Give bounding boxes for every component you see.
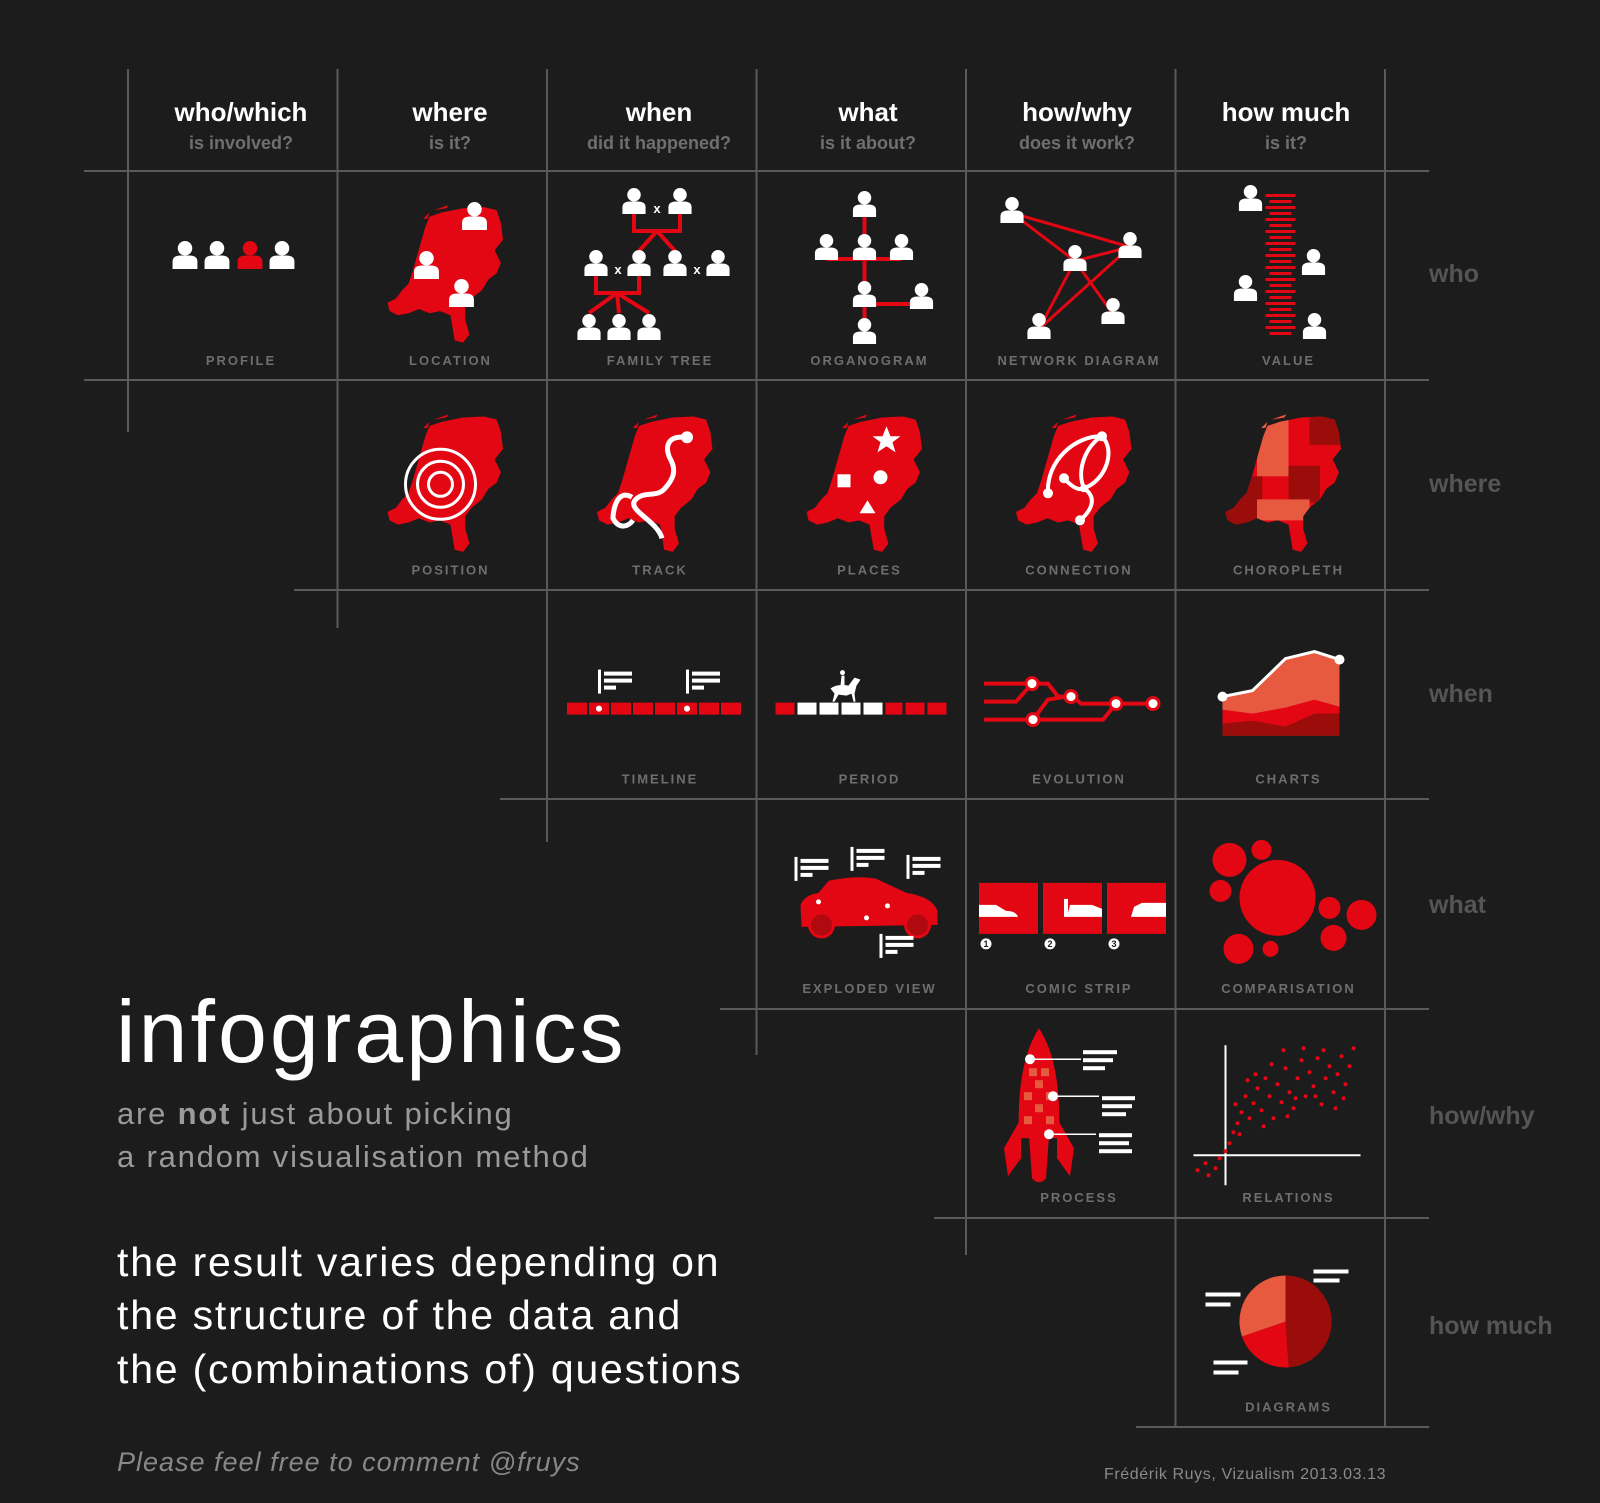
cell: comic strip: 3 [1111,939,1117,949]
cell: track [597,414,712,577]
cell: relations [1194,1045,1360,1205]
header: who/which: who/which [174,97,307,127]
cell: family tree: x [693,262,701,277]
header: when [587,97,731,153]
header: what: is it about? [820,133,916,153]
cell: network diagram [998,197,1160,368]
subtitle: are not just about picking [117,1096,514,1131]
header: how/why [1019,97,1135,153]
cell: connection [1016,414,1133,577]
cell: profile: PROFILE [206,353,276,368]
header: who/which: is involved? [189,133,293,153]
row label: how much: how much [1429,1312,1553,1340]
cell: period: PERIOD [839,772,900,787]
subtitle: a random visualisation method [117,1139,590,1174]
header: where: is it? [429,133,471,153]
cell: period [776,670,946,787]
cell: comic strip [979,883,1166,996]
credit: Frédérik Ruys, Vizualism 2013.03.13 [1104,1466,1386,1483]
cell: network diagram: NETWORK DIAGRAM [998,353,1160,368]
cell: family tree [577,188,730,368]
cell: position [388,414,503,577]
cell: family tree: x [653,201,661,216]
header: how much: is it? [1265,133,1307,153]
header: how/why: does it work? [1019,133,1135,153]
cell: connection: CONNECTION [1025,562,1133,577]
header: who/which [174,97,307,153]
cell: family tree: x [614,262,622,277]
cell: timeline: TIMELINE [622,772,698,787]
header: what: what [837,97,898,127]
cell: evolution [984,678,1159,787]
row label: where: where [1428,470,1501,498]
cell: comparisation: COMPARISATION [1221,981,1356,996]
cell: organogram: ORGANOGRAM [810,353,929,368]
header: when: when [625,97,692,127]
cell: places [806,414,922,577]
main statement: the structure of the data and [117,1292,682,1338]
cell: process: PROCESS [1040,1190,1118,1205]
footer comment: Please feel free to comment @fruys [117,1447,581,1477]
cell: location: LOCATION [409,353,492,368]
cell: exploded view: EXPLODED VIEW [802,981,937,996]
cell: position: POSITION [411,562,490,577]
row label: who: who [1428,260,1479,288]
cell: places: PLACES [837,562,902,577]
header: where: where [411,97,488,127]
cell: comic strip: 1 [983,939,989,949]
cell: relations: RELATIONS [1242,1190,1335,1205]
cell: diagrams [1206,1270,1348,1414]
cell: evolution: EVOLUTION [1032,772,1126,787]
cell: choropleth [1226,413,1344,577]
header: how/why: how/why [1022,97,1132,127]
row label: when: when [1428,680,1493,708]
cell: organogram [810,191,933,368]
main statement: the (combinations of) questions [117,1346,743,1392]
header: how much: how much [1222,97,1350,127]
cell: comic strip: 2 [1047,939,1053,949]
header: when: did it happened? [587,133,731,153]
cell: profile [173,241,294,368]
cell: value [1234,185,1326,368]
cell: exploded view [794,847,940,996]
cell: value: VALUE [1262,353,1315,368]
row label: how/why: how/why [1429,1102,1535,1130]
cell: comic strip: COMIC STRIP [1025,981,1133,996]
cell: process [1004,1028,1135,1205]
main statement: the result varies depending on [117,1239,720,1285]
cell: location [388,202,503,368]
header: where [411,97,488,153]
cell: comparisation [1210,840,1376,996]
cell: family tree: FAMILY TREE [607,353,713,368]
row label: what: what [1428,891,1487,919]
cell: charts [1218,652,1344,787]
cell: track: TRACK [632,562,688,577]
cell: choropleth: CHOROPLETH [1233,562,1344,577]
header: what [820,97,916,153]
cell: timeline [567,670,741,787]
cell: charts: CHARTS [1255,772,1322,787]
header: how much [1222,97,1350,153]
title: infographics [116,982,627,1081]
cell: diagrams: DIAGRAMS [1245,1400,1332,1414]
